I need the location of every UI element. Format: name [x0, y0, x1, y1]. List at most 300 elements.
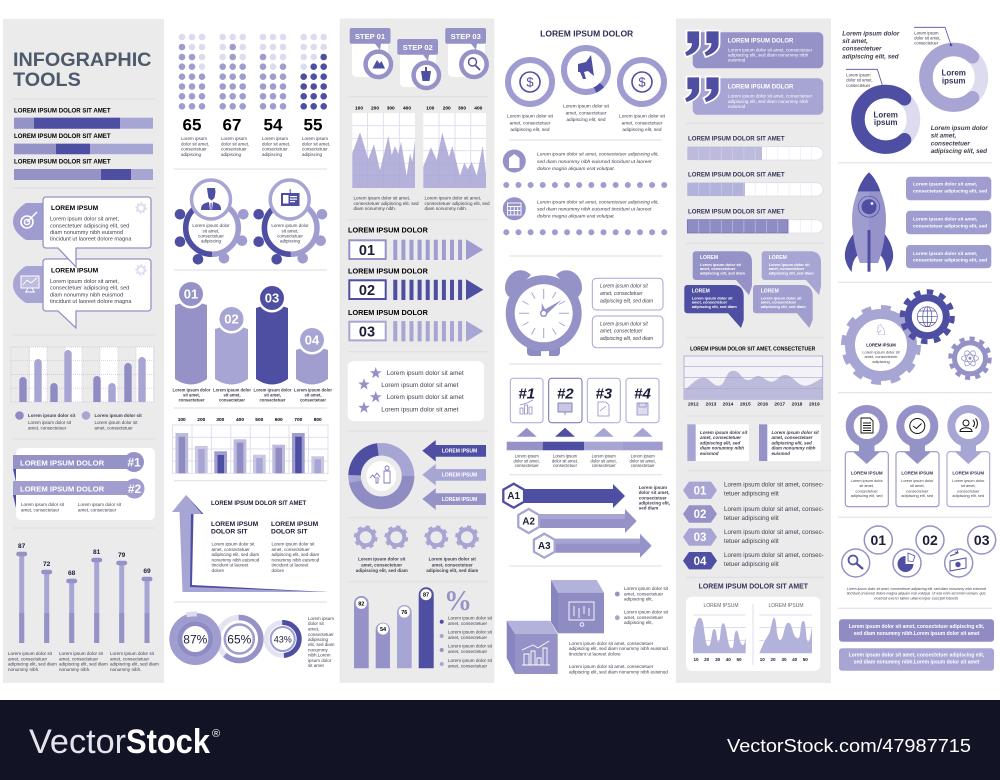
arrow block: LOREM IPSUM DOLOR SIT AMET: [211, 501, 306, 507]
area line chart: 2013: [706, 402, 717, 408]
big gear: LOREM IPSUM: [866, 343, 896, 348]
steps: STEP 02: [403, 43, 433, 52]
donut charts: Lorem ipsum dolor: [842, 30, 900, 37]
quote cards: [684, 30, 823, 115]
lollipop chart: 81: [93, 549, 101, 556]
chart legend: Lorem ipsum dolor sit: [94, 413, 142, 418]
numbered arrows: 03: [359, 324, 375, 340]
ring icons: [507, 48, 666, 133]
cubes: amet, consectetuer: [624, 615, 664, 620]
hexagon list: [683, 482, 824, 569]
timeline strip: dolor sit amet,: [552, 458, 578, 463]
area charts: 300: [387, 106, 395, 112]
dot matrix charts: [179, 34, 330, 157]
rocket cards: consectetuer adipiscing elit, sed: [913, 258, 987, 264]
hexagon arrows: Lorem ipsum: [639, 485, 667, 490]
lollipop captions: adipiscing elit, sed diam: [59, 662, 108, 667]
lollipop captions: adipiscing elit, sed diam: [110, 662, 159, 667]
lollipop captions: Lorem ipsum dolor sit: [110, 651, 155, 656]
footer watermark band: ®: [212, 728, 220, 740]
speech bubbles: adipiscing elit, sed diam: [761, 304, 806, 309]
donut charts: ipsum: [942, 76, 965, 85]
dot matrix charts: adipiscing: [221, 152, 242, 157]
speech bubbles: Lorem ipsum dolor sit: [769, 262, 810, 267]
twin area charts: 20: [770, 657, 776, 662]
donut charts: sit amet,: [931, 133, 956, 140]
twin area charts: 40: [726, 657, 731, 662]
percent legend: Lorem ipsum dolor sit: [448, 644, 493, 649]
donut charts: adipiscing elit, sed: [931, 148, 987, 155]
cubes: Lorem ipsum dolor sit: [624, 586, 669, 591]
speech bubbles: adipiscing elit, sed diam: [692, 304, 737, 309]
rounded bar chart: 87: [423, 593, 429, 599]
quote cards: LOREM IPSUM DOLOR: [728, 38, 794, 44]
side strip notes: adipiscing elit, sed: [700, 440, 741, 446]
pin cards: [845, 409, 990, 507]
cylinder chart: 01: [184, 287, 198, 302]
hexagon arrows: A3: [538, 541, 551, 552]
twin area charts: LOREM IPSUM: [768, 603, 804, 609]
star list card: Lorem ipsum dolor sit amet: [381, 406, 459, 414]
arrow block: DOLOR SIT: [271, 528, 308, 536]
dot matrix charts: adipiscing: [262, 152, 283, 157]
area charts: 100: [355, 106, 363, 112]
callout text one: tincidunt ut laoreet dolore magna: [50, 237, 132, 243]
icon: clock: [910, 418, 925, 434]
percent legend: amet, consectetuer: [448, 663, 488, 668]
area charts: consectetuer adipiscing elit, sed: [354, 201, 419, 206]
percent legend: %: [444, 586, 472, 617]
cubes: amet, consectetuer: [624, 591, 664, 596]
numbered circles: 01: [871, 532, 886, 548]
hexagon arrows: consectetuer: [639, 496, 667, 500]
lollipop captions: amet, consectetuer: [110, 656, 150, 661]
bottom buttons: sed diam nonummy nibh.Lorem ipsum dolor sit amet: [854, 631, 980, 637]
segmented progress bars: LOREM IPSUM DOLOR SIT AMET: [688, 208, 785, 215]
bottom buttons: sed diam nonummy nibh.Lorem ipsum dolor sit amet: [854, 660, 980, 666]
panel: column four: [503, 29, 670, 674]
twin area charts: 30: [715, 657, 721, 662]
chart legend: [15, 411, 142, 430]
side strip notes: [687, 424, 821, 461]
cubes: [507, 580, 669, 674]
rounded bar chart: 54: [380, 627, 387, 633]
cylinder chart: sit amet,: [264, 392, 281, 398]
arrow block: Lorem ipsum dolor sit: [212, 542, 255, 547]
donut charts: Lorem: [873, 111, 898, 120]
gear ring: id card: adipiscing: [280, 239, 301, 244]
icon: presentation: [558, 403, 572, 415]
cubes: adipiscing elit, sed diam nonummy nibh euismod: [569, 646, 668, 651]
numbered circles: tincidunt ut laoreet dolore magna aliquam erat volutpat. Ut wisi enim ad minim veniam, quis: [847, 591, 986, 596]
ribbons card: [13, 448, 155, 520]
speech bubbles: [684, 251, 821, 328]
dot matrix charts: Lorem ipsum: [302, 136, 328, 141]
twin area charts: 10: [760, 657, 765, 662]
percentage donuts: 87%: [183, 632, 208, 646]
star list card: Lorem ipsum dolor sit amet: [387, 394, 464, 401]
chart legend: amet, consectetuer: [94, 426, 133, 430]
twin area charts: 30: [781, 657, 787, 662]
quote cards: Lorem ipsum dolor sit amet, consectetuer: [728, 47, 813, 52]
star list card: [348, 361, 484, 421]
icon list: sed diam nonummy nibh euismod tincidunt ut laoreet: [537, 206, 652, 212]
ranked cards: #1: [518, 386, 535, 403]
area charts: 200: [371, 106, 379, 112]
percentage donuts: consectetuer: [308, 632, 334, 637]
gear icons: amet, consectetuer: [432, 562, 473, 567]
dot matrix charts: Lorem ipsum: [262, 136, 288, 141]
numbered circles: [842, 526, 996, 600]
lollipop captions: nonummy nibh.: [59, 667, 90, 672]
arrow block: adipiscing elit, sed diam: [212, 552, 260, 557]
big gear: adipiscing: [872, 359, 890, 364]
icon: document: [861, 418, 873, 433]
gear icons: adipiscing elit, sed diam: [426, 568, 478, 573]
arrow block: DOLOR SIT: [211, 528, 248, 536]
callout text one: LOREM IPSUM: [51, 205, 99, 212]
area charts: Lorem ipsum dolor sit amet,: [354, 196, 410, 200]
area charts: 100: [426, 106, 435, 112]
arrow block: amet, consectetuer: [272, 547, 310, 552]
arrow block: tincidunt ut laoreet: [272, 563, 309, 568]
percentage donuts: dolor sit: [308, 621, 325, 626]
lollipop captions: Lorem ipsum dolor sit: [59, 651, 104, 656]
footer watermark band: VectorStock.com/47987715: [727, 736, 971, 756]
ranked cards: #4: [634, 386, 651, 403]
cylinder chart: sit amet,: [304, 392, 322, 398]
timeline strip: dolor sit amet,: [630, 458, 656, 463]
rocket cards: [906, 177, 991, 268]
hexagon list: Lorem ipsum dolor sit amet, consec-: [724, 529, 824, 536]
ribbons card: Lorem ipsum dolor sit: [78, 502, 122, 507]
percentage donuts: amet,: [308, 626, 319, 632]
gear ring: person: Lorem ipsum dolor: [192, 223, 230, 228]
dot matrix charts: dolor sit amet,: [221, 141, 249, 146]
area charts: [352, 106, 490, 211]
side strip notes: adipiscing elit, sed: [772, 440, 812, 446]
hexagon arrows: dolor sit amet,: [639, 490, 669, 495]
area charts: 400: [474, 106, 483, 112]
ring icons: amet, consectetuer: [566, 110, 607, 116]
donut charts: sit amet,: [842, 38, 868, 45]
cylinder chart: consectetuer: [178, 397, 205, 402]
twin area charts: 50: [736, 657, 742, 662]
percentage donuts: sit amet: [308, 663, 325, 668]
icon: house: [509, 154, 520, 168]
donut charts: consectetuer: [914, 40, 939, 45]
quote cards: euismod: [728, 58, 746, 63]
heading: LOREM IPSUM DOLOR: [540, 29, 633, 39]
cylinder chart: 04: [305, 333, 320, 348]
icon list: Lorem ipsum dolor sit amet, consectetuer adipiscing elit,: [537, 152, 659, 158]
callout text two: LOREM IPSUM: [51, 268, 99, 274]
arrow block: dolore: [272, 568, 285, 573]
percentage donuts: 65%: [227, 632, 252, 646]
icon: pie: [898, 553, 915, 572]
twin area charts: 20: [704, 657, 710, 662]
ranked cards: #3: [595, 386, 613, 403]
lollipop captions: nonummy nibh.: [110, 667, 141, 672]
cubes: adipiscing elit,: [624, 620, 653, 625]
pin cards: LOREM IPSUM: [952, 471, 984, 476]
donut charts: consectetuer: [842, 46, 882, 53]
panel: column two: [172, 34, 335, 668]
area line chart: 2012: [688, 402, 699, 408]
ribbons card: #2: [128, 482, 141, 496]
lollipop chart: 68: [68, 570, 76, 577]
segmented progress bars: LOREM IPSUM DOLOR SIT AMET: [688, 171, 785, 178]
rounded bar chart: 76: [401, 610, 407, 616]
clock captions: amet, consectetuer: [600, 291, 643, 297]
pin cards: sit amet,: [859, 483, 874, 488]
numbered arrows: LOREM IPSUM DOLOR: [348, 308, 429, 317]
cubes: adipiscing elit,: [624, 596, 653, 602]
hexagon list: tetuer adipiscing elit: [724, 561, 779, 568]
timeline strip: dolor sit amet,: [591, 458, 617, 463]
twin area charts: LOREM IPSUM: [703, 603, 739, 609]
donut charts: adipiscing elit, sed: [842, 53, 899, 60]
hexagon list: 03: [694, 532, 706, 544]
cubes: Lorem ipsum dolor sit amet, consectetuer: [569, 664, 654, 669]
lollipop captions: nonummy nibh.: [8, 667, 39, 672]
numbered arrows: 02: [359, 283, 375, 299]
gear ring: person: [175, 180, 249, 265]
clock captions: Lorem ipsum dolor sit: [600, 321, 648, 327]
side strip notes: amet, consectetuer: [700, 435, 741, 440]
gear ring: person: consectetuer: [198, 234, 224, 239]
callout text two: consectetuer adipiscing elit, sed: [50, 286, 129, 292]
arrow block: LOREM IPSUM: [211, 521, 259, 528]
percent legend: Lorem ipsum dolor sit: [448, 658, 493, 663]
side strip notes: Lorem ipsum dolor sit: [772, 430, 819, 435]
dot matrix charts: adipiscing: [302, 152, 323, 157]
ring icons: Lorem ipsum dolor sit: [507, 114, 554, 120]
big gear: Lorem ipsum dolor sit: [862, 349, 901, 354]
side strip notes: diam nonummy nibh: [772, 446, 816, 451]
small gear with atom: [950, 339, 990, 378]
dot matrix charts: consectetuer: [262, 147, 288, 152]
percent legend: amet, consectetuer: [448, 649, 488, 654]
hexagon arrows: A2: [522, 516, 536, 528]
area charts: 200: [443, 106, 451, 112]
timeline strip: Lorem ipsum: [592, 453, 616, 458]
clock captions: Lorem ipsum dolor sit: [600, 284, 648, 290]
hexagon list: 04: [694, 556, 707, 568]
icon: magnifier: [468, 58, 480, 70]
gear ring: id card: sit amet,: [281, 228, 299, 233]
lollipop chart: [16, 543, 153, 643]
clock captions: adipiscing elit, sed diam: [600, 336, 653, 342]
ribbons card: #1: [127, 456, 141, 470]
clock captions: [592, 278, 663, 348]
pin cards: Lorem ipsum dolor: [901, 478, 934, 483]
segmented progress bars: LOREM IPSUM DOLOR SIT AMET: [688, 135, 785, 142]
icon: document: [598, 402, 609, 416]
donut charts: Lorem ipsum: [914, 30, 939, 35]
icon list: [503, 150, 664, 232]
area charts: 300: [458, 106, 466, 112]
pin cards: LOREM IPSUM: [901, 471, 933, 476]
big gear: [844, 308, 918, 382]
timeline strip: consectetuer: [592, 463, 616, 468]
hexagon list: tetuer adipiscing elit: [724, 515, 779, 522]
pin cards: consectetuer: [906, 488, 929, 493]
area charts: Lorem ipsum dolor sit amet,: [424, 196, 481, 200]
ring icons: amet, consectetuer: [622, 120, 663, 126]
gear icons: Lorem ipsum dolor sit: [358, 556, 406, 561]
side strip notes: euismod: [772, 451, 790, 456]
icon: chart: [520, 400, 533, 414]
footer watermark band: Stock: [126, 723, 210, 761]
timeline strip: Lorem ipsum: [631, 453, 655, 458]
donut charts: dolor sit amet,: [914, 35, 941, 40]
icon list: dolore magna aliquam erat volutpat.: [537, 166, 615, 172]
timeline strip: consectetuer: [515, 463, 539, 468]
area charts: diam nonummy nibh.: [424, 206, 467, 211]
dark gear with globe: [902, 292, 952, 342]
rocket cards: consectetuer adipiscing elit, sed: [913, 188, 987, 194]
ring icons: adipiscing elit, sed: [622, 127, 662, 133]
rocket cards: Lorem ipsum dolor sit amet,: [913, 217, 978, 223]
rounded bar chart: [354, 587, 434, 668]
numbered arrows: 01: [359, 243, 375, 259]
timeline strip: consectetuer: [631, 463, 655, 468]
title: TOOLS: [13, 69, 81, 91]
hexagon list: 02: [694, 509, 706, 521]
area charts: consectetuer adipiscing elit, sed: [424, 201, 490, 206]
rocket cards: consectetuer adipiscing elit, sed: [913, 223, 987, 229]
gear ring: id card: Lorem ipsum dolor: [271, 223, 309, 228]
area line chart: 2014: [723, 402, 734, 408]
clock captions: adipiscing elit, sed diam: [600, 298, 653, 304]
area line chart: 2016: [757, 402, 768, 408]
donut charts: consectetuer: [931, 140, 970, 147]
cylinder chart: Lorem ipsum dolor: [254, 388, 292, 392]
percentage donuts: Lorem ipsum: [308, 616, 334, 621]
twin area charts: 40: [792, 657, 798, 662]
pin cards: Lorem ipsum dolor: [952, 478, 985, 483]
hexagon list: 01: [694, 486, 707, 498]
percentage donuts: [173, 614, 335, 668]
ranked cards: [510, 378, 659, 423]
steps: STEP 01: [355, 32, 386, 41]
star list card: Lorem ipsum dolor sit amet: [387, 370, 464, 377]
dot matrix charts: 54: [264, 116, 283, 135]
gear ring: id card: [253, 180, 327, 265]
icon list: dolore magna aliquam erat volutpat.: [537, 214, 615, 220]
hexagon list: Lorem ipsum dolor sit amet, consec-: [724, 506, 824, 513]
timeline strip: consectetuer: [553, 463, 578, 468]
quote cards: Lorem ipsum dolor sit amet, consectetuer: [728, 94, 813, 99]
icon: alarm clock: [505, 270, 582, 356]
speech bubbles: LOREM: [761, 288, 779, 294]
cubes: tincidunt ut laoreet dolore: [569, 652, 621, 656]
icon: money: [950, 550, 966, 571]
steps: STEP 03: [451, 32, 481, 41]
numbered arrows: LOREM IPSUM DOLOR: [348, 266, 429, 275]
progress bars: LOREM IPSUM DOLOR SIT AMET: [14, 108, 111, 114]
dot matrix charts: consectetuer: [221, 147, 247, 152]
hexagon list: Lorem ipsum dolor sit amet, consec-: [724, 482, 824, 489]
pin cards: adipiscing elit, sed: [952, 493, 984, 498]
chart legend: amet, consectetuer: [28, 426, 67, 430]
clock captions: amet, consectetuer: [600, 329, 643, 335]
arrow block: Lorem ipsum dolor sit: [272, 542, 315, 547]
percent legend: amet, consectetuer: [448, 621, 488, 626]
percent legend: Lorem ipsum dolor sit: [448, 630, 493, 634]
lollipop captions: adipiscing elit, sed diam: [8, 662, 57, 667]
speech bubbles: Lorem ipsum dolor sit: [700, 262, 742, 267]
icon: target: [21, 212, 37, 228]
quote cards: adipiscing elit, sed diam nonummy nibh: [728, 99, 809, 104]
percentage donuts: elit, sed diam: [308, 642, 335, 647]
dot matrix charts: 55: [304, 116, 322, 135]
grid bar chart: 500: [255, 417, 264, 423]
arrow block: nonummy nibh euismod: [272, 558, 320, 562]
cylinder chart: Lorem ipsum dolor: [213, 388, 251, 392]
donut charts: dolor sit amet,: [846, 78, 873, 83]
gear ring: person: sit amet,: [202, 228, 220, 233]
percent legend: [440, 586, 493, 668]
progress bars: LOREM IPSUM DOLOR SIT AMET: [14, 158, 111, 166]
icon: growth chart: [522, 641, 550, 665]
star list card: Lorem ipsum dolor sit amet: [381, 382, 459, 389]
numbered circles: 02: [922, 532, 938, 548]
ring icons: $: [526, 74, 534, 90]
speech bubbles: amet, consectetuer: [769, 266, 805, 271]
gear icons: amet, consectetuer: [361, 562, 402, 567]
arrow block: adipiscing elit, sed diam: [272, 552, 320, 557]
cylinder chart: 02: [224, 312, 239, 327]
icon: calendar: [508, 203, 521, 215]
timeline strip: Lorem ipsum: [515, 453, 539, 458]
speech bubbles: adipiscing elit, sed diam: [700, 270, 746, 275]
cylinder chart: [173, 280, 332, 402]
arrow block: LOREM IPSUM: [271, 521, 319, 528]
callout text two: tincidunt ut laoreet dolore magna: [50, 299, 132, 305]
donut charts: [842, 27, 988, 155]
speech bubbles: LOREM: [700, 255, 718, 261]
segmented progress bars: [687, 135, 823, 233]
percentage donuts: nibh.Lorem: [308, 653, 331, 658]
grid bar chart: 400: [236, 417, 244, 423]
twin area charts: 10: [693, 657, 699, 662]
speech bubbles: amet, consectetuer: [761, 300, 797, 305]
area line chart: 2019: [809, 402, 820, 408]
cylinder chart: sit amet,: [224, 392, 240, 398]
hexagon arrows: [503, 484, 670, 558]
dot matrix charts: consectetuer: [181, 147, 207, 152]
icon: podium: [421, 67, 431, 81]
hexagon arrows: A1: [507, 491, 521, 502]
side arrows: LOREM IPSUM: [442, 472, 477, 478]
panel: column one: [8, 49, 159, 672]
speech bubbles: amet, consectetuer: [700, 266, 736, 271]
dot matrix charts: dolor sit amet,: [302, 141, 330, 146]
arrow block: dolore: [212, 568, 225, 573]
icon: board: [569, 602, 594, 626]
side arrows: LOREM IPSUM: [442, 448, 477, 454]
chart legend: Lorem ipsum dolor sit: [94, 420, 138, 425]
gear ring: person: adipiscing: [201, 239, 222, 244]
title: [13, 49, 151, 91]
percent legend: Lorem ipsum dolor sit: [448, 616, 493, 620]
numbered circles: Lorem ipsum dolor sit amet, consectetuer adipiscing elit, sed diam nonummy nibh euismod: [847, 586, 987, 591]
speech bubbles: adipiscing elit, sed diam: [769, 270, 814, 275]
quote cards: LOREM IPSUM DOLOR: [728, 85, 794, 91]
rocket cards: Lorem ipsum dolor sit amet,: [913, 251, 978, 257]
